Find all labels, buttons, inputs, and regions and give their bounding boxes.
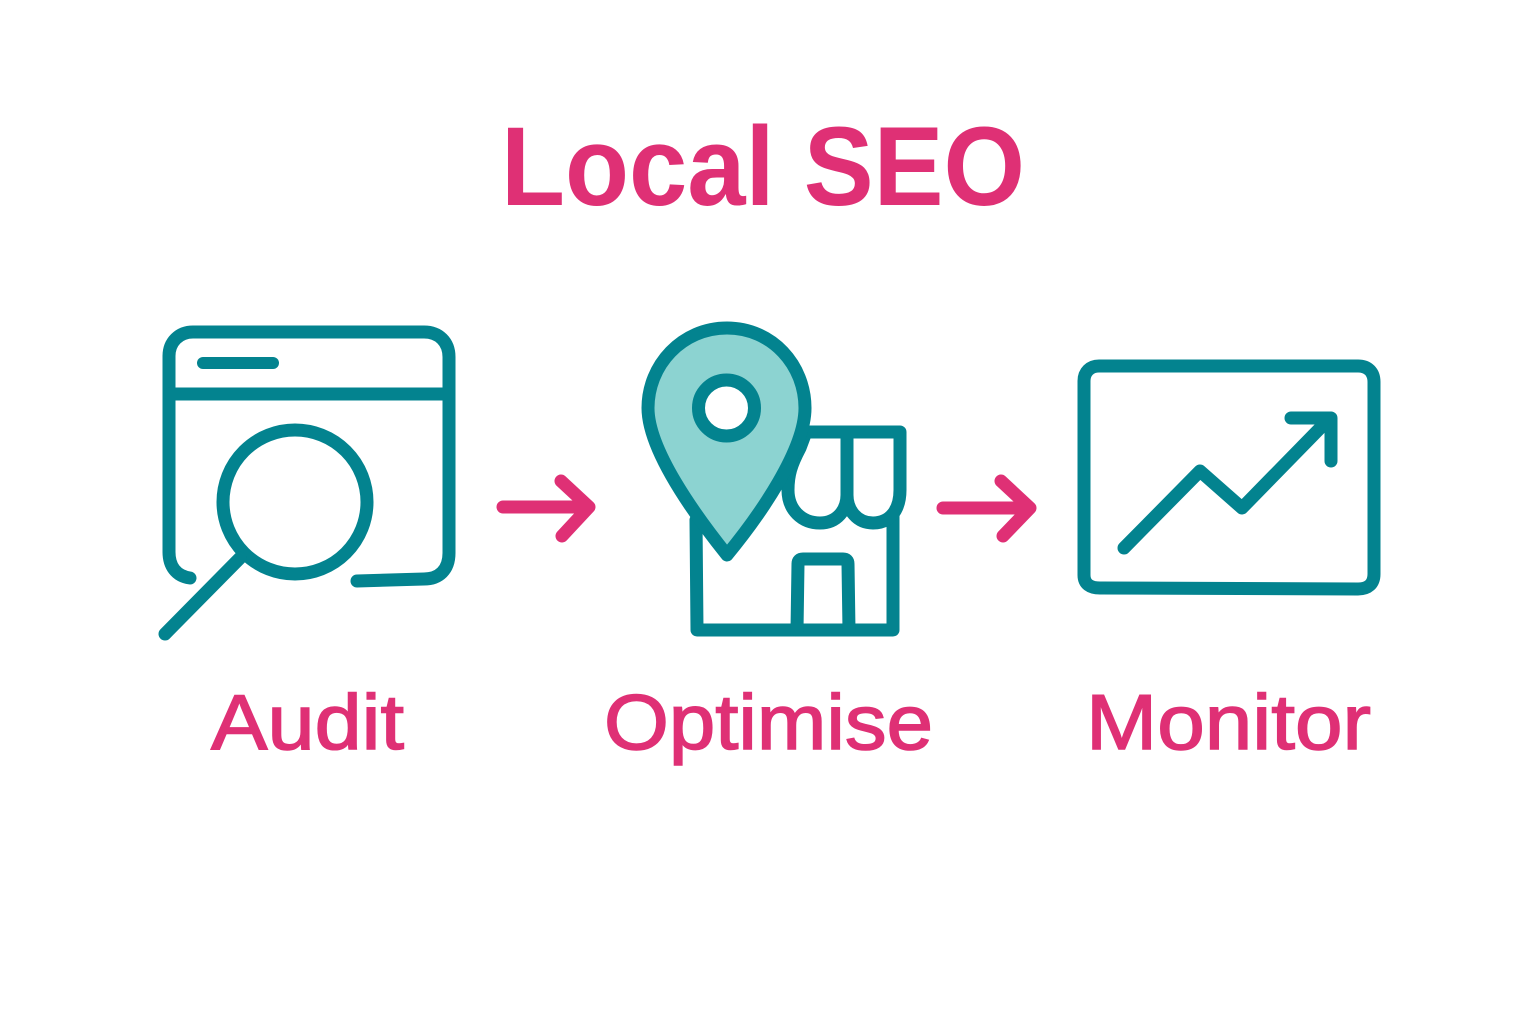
- label: monitor: Monitor: [1086, 678, 1371, 766]
- arrow: optimise to monitor: [943, 481, 1030, 536]
- pin hole: [698, 380, 754, 436]
- map pin: [648, 328, 805, 555]
- label: optimise: Optimise: [604, 678, 933, 766]
- icon: map pin and storefront: [648, 328, 900, 630]
- icon: chart on screen: [1084, 366, 1374, 589]
- storefront door: [797, 559, 849, 630]
- arrow: audit to optimise: [503, 481, 589, 536]
- storefront awning: [788, 432, 900, 523]
- label: audit: Audit: [211, 678, 404, 766]
- icon: browser window with magnifying glass: [165, 332, 449, 634]
- storefront body: [696, 515, 893, 630]
- title: Local SEO: [501, 104, 1025, 229]
